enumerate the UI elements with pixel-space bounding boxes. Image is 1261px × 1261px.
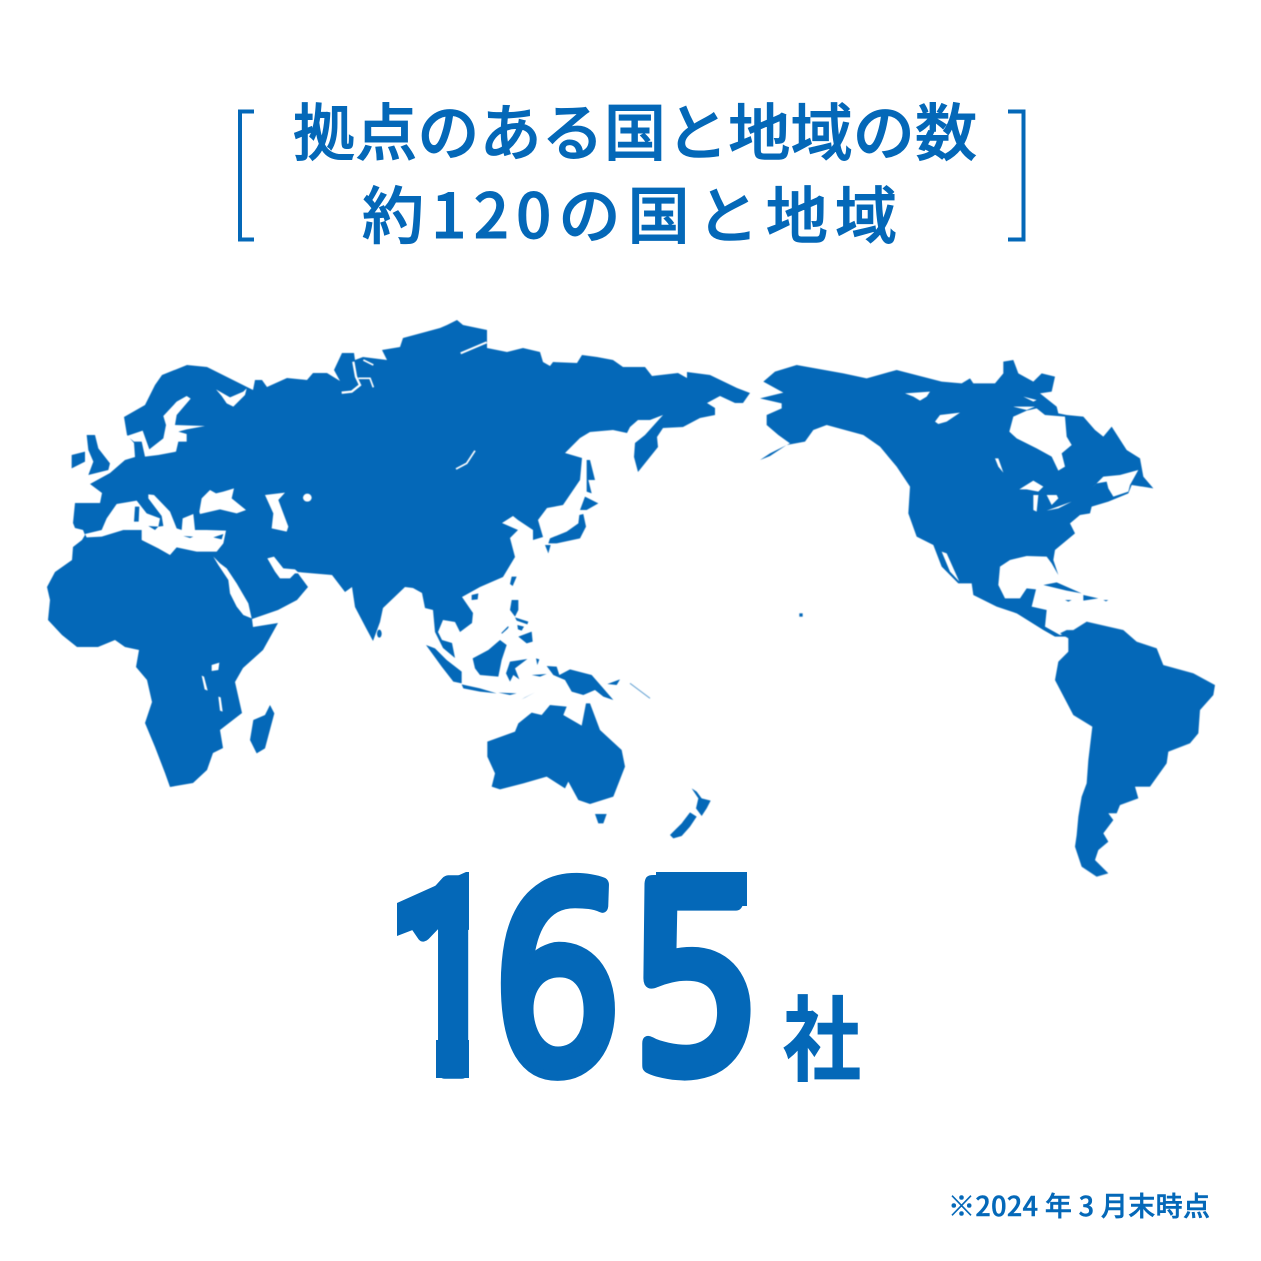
islands: Japan and East Asia	[510, 460, 598, 586]
Lakes Erie and Ontario	[1047, 502, 1072, 511]
right bracket	[1008, 112, 1024, 240]
islands: Southeast Asia and Oceania	[377, 593, 711, 838]
Mindanao	[518, 632, 533, 643]
Lake Tanganyika	[202, 676, 208, 691]
Australia	[487, 703, 625, 804]
Lake Baikal	[456, 451, 475, 469]
Britain	[87, 435, 110, 475]
islands: Europe	[72, 435, 223, 539]
Sulawesi	[506, 659, 527, 682]
Visayas	[515, 617, 528, 631]
heading: number of countries and regions	[240, 83, 1024, 256]
North and Central America	[760, 360, 1153, 637]
Borneo	[473, 640, 507, 677]
Mediterranean Sea	[85, 494, 226, 555]
Hawaii	[799, 613, 803, 617]
White Sea	[216, 388, 247, 407]
map: Eurasia and Africa	[47, 320, 750, 787]
numeral corner squaring for the 1 and 5	[397, 872, 747, 1078]
Persian Gulf	[267, 557, 299, 578]
Gulf of St Lawrence	[1092, 470, 1138, 497]
Red Sea	[213, 557, 252, 618]
left bracket	[240, 112, 254, 240]
Caspian Sea	[265, 493, 288, 532]
Baltic Sea	[125, 396, 205, 457]
New Zealand south	[670, 812, 697, 838]
heading line 1: 拠点のある国と地域の数	[293, 83, 977, 173]
New Britain	[607, 679, 620, 685]
unit: companies: 社	[783, 966, 861, 1100]
Cyprus	[213, 534, 223, 539]
Sicily	[148, 526, 158, 530]
Java	[462, 684, 497, 693]
islands: Madagascar	[250, 705, 274, 753]
Hudson Bay	[1009, 408, 1072, 471]
Sardinia and Corsica	[134, 507, 139, 522]
digit 1: 1	[384, 860, 513, 1112]
New Zealand north	[692, 788, 711, 816]
Hokkaido	[580, 497, 598, 510]
Puerto Rico	[1103, 600, 1108, 601]
Kara inlet	[363, 360, 373, 365]
Lake Huron	[1047, 495, 1058, 505]
digit 6: 6	[491, 860, 622, 1112]
Great Bear Lake	[905, 392, 930, 401]
Gulf of Ob	[342, 362, 360, 393]
Lesser Sunda	[498, 693, 517, 695]
Lake Superior	[1019, 481, 1043, 492]
Honshu	[548, 514, 586, 543]
sea cutouts: Europe and western Asia	[85, 388, 312, 555]
Aral Sea	[303, 494, 312, 502]
Luzon	[510, 600, 518, 617]
Palawan	[502, 627, 508, 633]
Gulf of Yenisei	[358, 378, 373, 387]
Halmahera	[536, 658, 539, 665]
Tasmania	[595, 814, 607, 823]
North America landmass	[760, 360, 1153, 637]
Jamaica	[1065, 600, 1072, 602]
big number: 165 companies	[384, 860, 861, 1112]
Black Sea	[199, 488, 246, 514]
Taiwan	[510, 577, 517, 586]
Crete	[183, 536, 193, 538]
New Guinea	[547, 666, 613, 700]
Lake Malawi	[218, 697, 223, 712]
Great Slave Lake	[935, 413, 960, 424]
Sakhalin	[587, 460, 595, 493]
sea cutouts: Arabian region and African lakes	[202, 557, 299, 712]
Arctic channels	[1013, 397, 1037, 410]
Lake Winnipeg	[995, 458, 1003, 473]
Ireland	[72, 452, 85, 468]
Gulf of California	[942, 552, 959, 582]
Solomon Islands	[630, 683, 650, 698]
Kyushu	[545, 545, 551, 553]
Khatanga Gulf	[461, 342, 487, 353]
Seram	[532, 674, 547, 677]
Timor	[522, 692, 535, 699]
footnote: as of end of March 2024: ※2024 年 3 月末時点	[948, 1185, 1210, 1224]
Lake Victoria	[212, 663, 219, 671]
world map	[47, 320, 1215, 877]
Hispaniola	[1083, 595, 1098, 601]
digit 5: 5	[624, 860, 761, 1112]
heading line 2: 約120の国と地域	[362, 166, 897, 256]
South America	[1055, 622, 1215, 877]
sea cutouts: Siberia	[342, 342, 487, 469]
Hainan	[472, 593, 478, 600]
lake and bay cutouts	[905, 392, 1138, 582]
Cuba	[1043, 582, 1082, 593]
Lake Michigan	[1033, 495, 1038, 512]
Sri Lanka	[377, 630, 382, 638]
Sumatra	[426, 645, 462, 683]
